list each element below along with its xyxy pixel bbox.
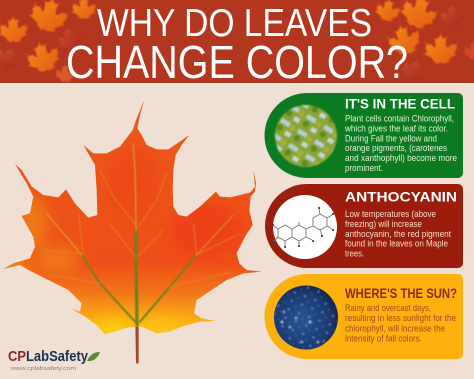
title: CHANGE COLOR? [66, 36, 408, 88]
body text: prominent. [345, 163, 383, 173]
panel: where's the sun [265, 274, 463, 359]
body text: During Fall the yellow and [345, 133, 437, 143]
body text: intensity of fall colors. [345, 334, 422, 344]
title [66, 2, 408, 88]
body text: which gives the leaf its color. [344, 123, 448, 133]
body text: trees. [345, 249, 364, 259]
logo leaf [87, 352, 100, 361]
heading: ANTHOCYANIN [345, 189, 457, 205]
icon: molecule circle [272, 195, 337, 259]
body text: found in the leaves on Maple [345, 239, 448, 249]
logo url: www.cplabsafety.com [10, 366, 76, 372]
body text: Rainy and overcast days, [345, 303, 431, 313]
leaf veins [43, 143, 240, 325]
leaf stem [135, 323, 139, 363]
body text: orange pigments, (carotenes [345, 143, 447, 153]
panel: anthocyanin [265, 184, 463, 268]
header leaves [0, 0, 474, 85]
leaf blade [4, 100, 262, 334]
body text: Low temperatures (above [345, 209, 436, 219]
panel: it's in the cell [264, 93, 463, 178]
title: WHY DO LEAVES [97, 2, 372, 45]
body text [344, 114, 457, 173]
body text [345, 303, 456, 344]
body text: Plant cells contain Chlorophyll, [345, 114, 454, 124]
heading: IT'S IN THE CELL [345, 96, 455, 112]
body text: and xanthophyll) become more [345, 153, 457, 163]
body text [345, 209, 451, 259]
maple leaf illustration [0, 90, 267, 363]
body text: resulting in less sunlight for the [345, 313, 456, 323]
body text: anthocyanin, the red pigment [345, 229, 451, 239]
header banner [0, 0, 474, 85]
logo [8, 348, 100, 372]
body text: chlorophyll, will increase the [345, 323, 445, 333]
body text: freezing) will increase [345, 219, 422, 229]
icon: plant cells circle [275, 105, 337, 167]
icon: rainy blue circle [274, 286, 338, 350]
logo wordmark: CPLabSafety [8, 348, 89, 365]
